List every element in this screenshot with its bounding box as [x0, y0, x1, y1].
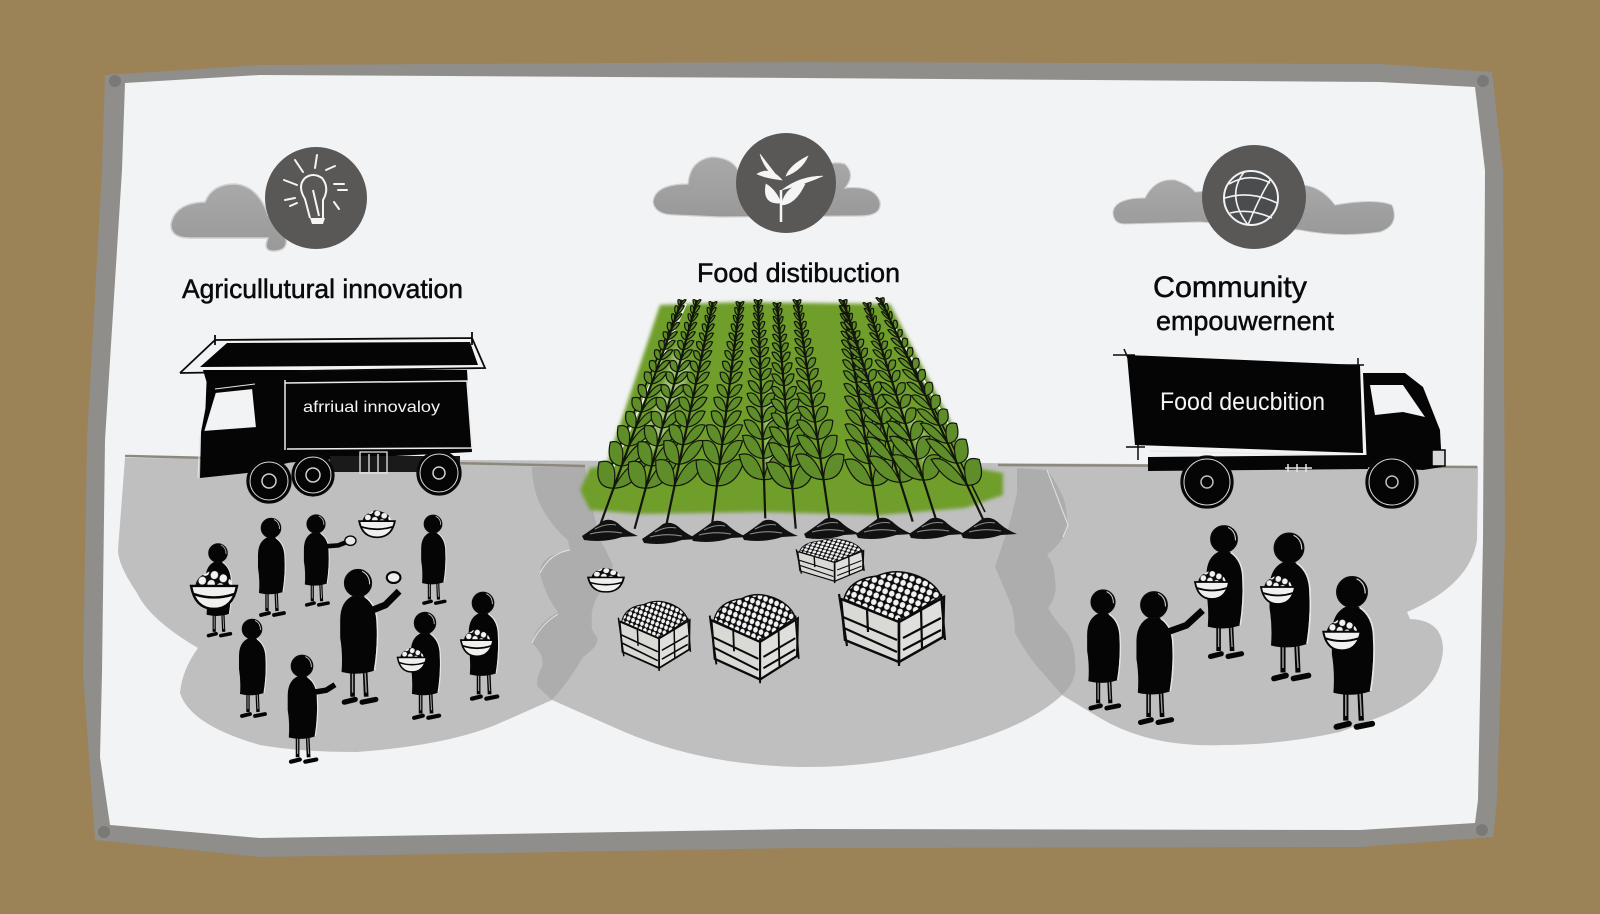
panel: white board — [100, 75, 1485, 838]
truck label: Food deucbition — [1160, 388, 1325, 416]
section: food distribution — [575, 133, 1017, 683]
people: right group — [1087, 526, 1374, 727]
ground: grey blobs — [118, 456, 1478, 767]
cloud: right — [1113, 180, 1394, 235]
heading: community empowerment: Community — [1153, 271, 1307, 304]
heading: community empowerment: empouwernent — [1156, 306, 1334, 336]
cloud: left — [171, 184, 286, 251]
icon: globe — [1202, 145, 1306, 249]
section: agricultural innovation — [171, 147, 499, 762]
truck: left — [180, 332, 485, 503]
people: left crowd — [191, 510, 499, 762]
plant rows — [575, 300, 706, 529]
soil mounds — [582, 520, 638, 541]
panel: grey sketched frame — [83, 62, 1505, 857]
heading: community empowerment — [1153, 271, 1334, 336]
heading: agricultural innovation: Agricullutural innovation — [182, 274, 463, 304]
crop field — [575, 298, 1017, 544]
truck label: afrriual innovaloy — [303, 399, 440, 416]
icon: plant — [736, 133, 836, 233]
icon: light bulb — [265, 147, 367, 249]
crates of produce — [588, 539, 945, 683]
section: community empowerment — [1087, 145, 1445, 727]
truck: right — [1113, 349, 1445, 508]
cloud: centre — [653, 157, 880, 217]
heading: food distribution: Food distibuction — [697, 258, 900, 288]
